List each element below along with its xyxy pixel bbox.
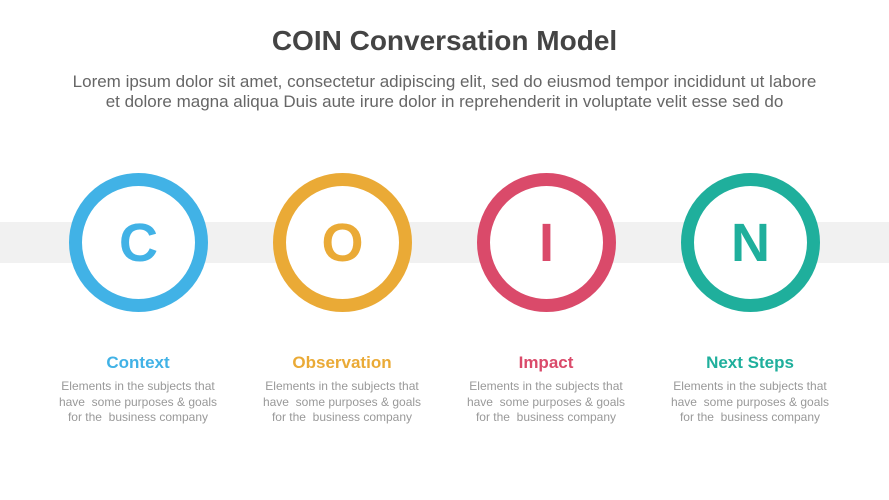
desc: Observation [263,379,421,424]
desc: Impact [467,379,625,424]
circle: N [681,173,820,312]
subtitle: et dolore magna aliqua Duis aute irure dolor in reprehenderit in voluptate velit esse sed do [106,92,783,111]
desc: Impact: have some purposes & goals [467,394,625,408]
circle: O: O [321,212,364,272]
desc: Next Steps: for the business company [680,410,820,424]
label: Next Steps: Next Steps [706,353,794,372]
desc: Next Steps: Elements in the subjects that [673,379,827,393]
circle: I [477,173,616,312]
label: Observation: Observation [292,353,392,372]
desc: Observation: Elements in the subjects that [265,379,419,393]
circle: I: I [539,212,554,272]
subtitle [73,72,816,111]
circle: C [69,173,208,312]
desc: Context: for the business company [68,410,208,424]
desc: Context [59,379,217,424]
desc: Observation: for the business company [272,410,412,424]
label: Impact: Impact [519,353,573,372]
desc: Next Steps: have some purposes & goals [671,394,829,408]
desc: Observation: have some purposes & goals [263,394,421,408]
label: Context: Context [106,353,170,372]
title: COIN Conversation Model [272,25,617,56]
desc: Next Steps [671,379,829,424]
circle: N: N [731,212,770,272]
subtitle: Lorem ipsum dolor sit amet, consectetur adipiscing elit, sed do eiusmod tempor incididunt ut labore [73,72,816,91]
background band [0,222,889,263]
circle: O [273,173,412,312]
circle: C: C [119,212,158,272]
desc: Impact: for the business company [476,410,616,424]
desc: Impact: Elements in the subjects that [469,379,623,393]
desc: Context: Elements in the subjects that [61,379,215,393]
desc: Context: have some purposes & goals [59,394,217,408]
